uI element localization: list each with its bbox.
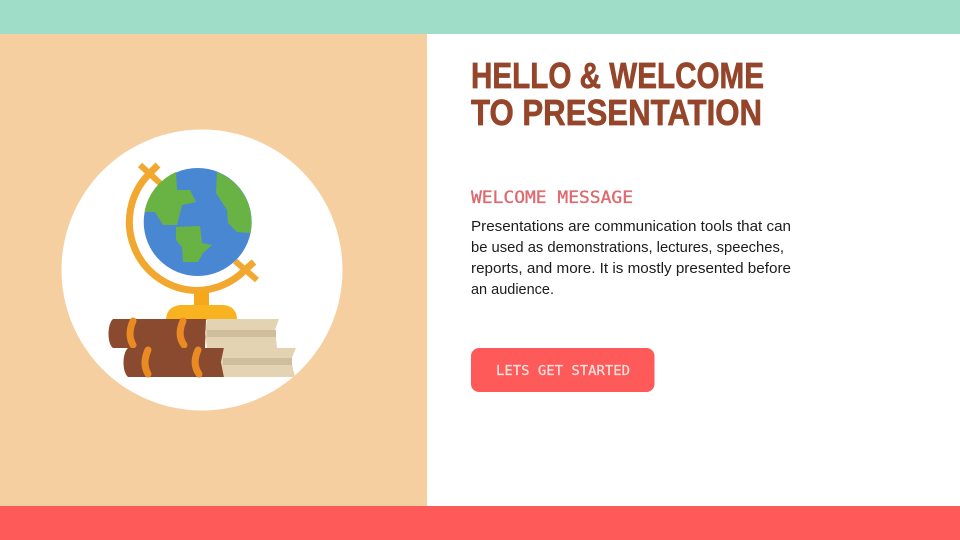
button: LETS GET STARTED bbox=[496, 364, 630, 379]
subheading: WELCOME MESSAGE bbox=[471, 188, 633, 208]
title: HELLO & WELCOME bbox=[471, 55, 764, 96]
icon: globe bbox=[144, 168, 252, 276]
top band bbox=[0, 0, 960, 34]
bottom band bbox=[0, 506, 960, 540]
white circle backdrop bbox=[62, 130, 342, 410]
icon: globe stand bbox=[129, 165, 257, 320]
illustration: globe on books bbox=[62, 130, 342, 410]
body text: be used as demonstrations, lectures, speeches, bbox=[471, 239, 784, 256]
icon: top book bbox=[108, 319, 279, 348]
left panel bbox=[0, 34, 427, 506]
title: TO PRESENTATION bbox=[471, 92, 762, 133]
title bbox=[471, 55, 764, 133]
body text bbox=[471, 218, 791, 298]
body text: reports, and more. It is mostly presented before bbox=[471, 260, 791, 277]
body text: an audience. bbox=[471, 281, 554, 298]
button bbox=[471, 348, 654, 392]
body text: Presentations are communication tools that can bbox=[471, 218, 791, 235]
icon: bottom book bbox=[124, 348, 296, 377]
